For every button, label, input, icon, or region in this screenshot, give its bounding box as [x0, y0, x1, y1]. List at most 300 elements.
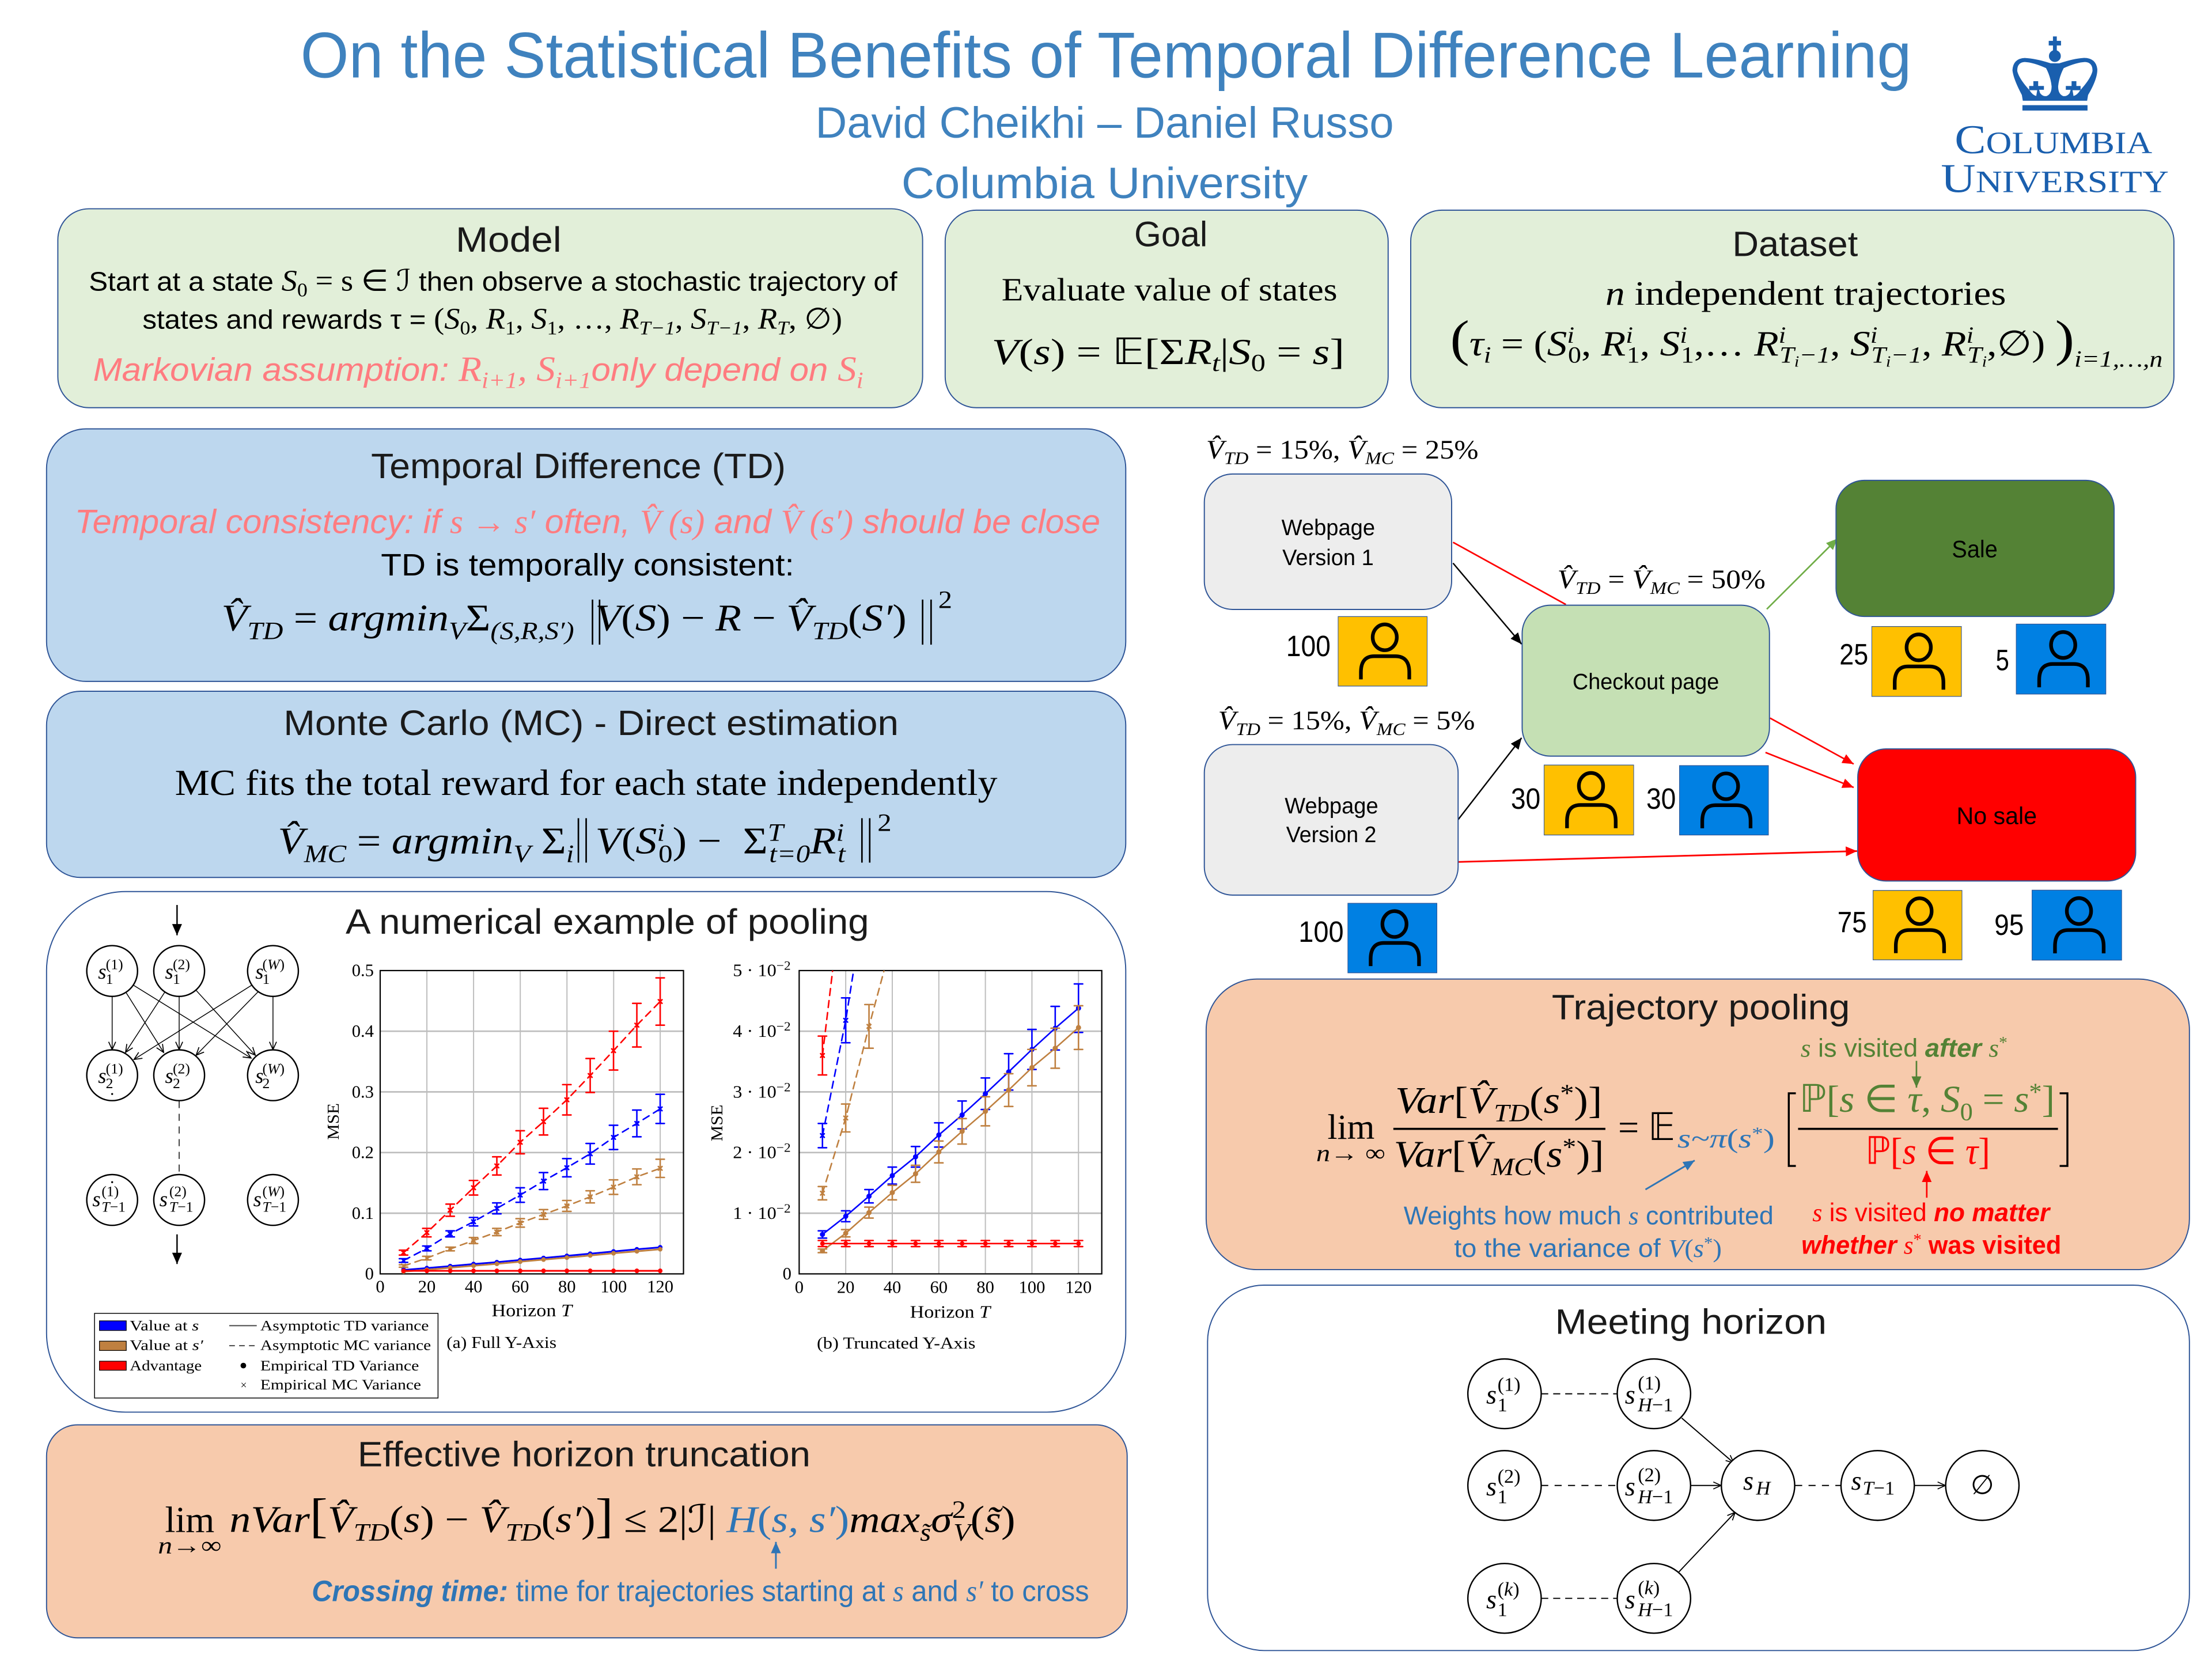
formula: MC variance denominator: s [1546, 1133, 1561, 1175]
legend: Asymptotic MC variance [260, 1337, 431, 1354]
formula: expectation subscript: s~π (s [1677, 1124, 1749, 1154]
axis labels: full y-axis: 0.2 [352, 1143, 374, 1162]
formula: trajectories: = ( [1491, 324, 1547, 363]
axis labels: full y-axis: Horizon T [491, 1301, 573, 1320]
formula: variance bound: TD [505, 1518, 541, 1546]
axis labels: truncated y-axis: MSE [709, 1105, 726, 1141]
callout: crossing time: Crossing time: time for trajectories starting at s and s′ to cross [312, 1574, 1089, 1608]
formula: MC variance denominator: * [1562, 1134, 1576, 1161]
box: checkout page [1522, 605, 1770, 756]
caption: truncated y-axis: (b) Truncated Y-Axis [817, 1335, 975, 1353]
label: webpage 1 values: TD [1224, 449, 1248, 468]
box: webpage version 2: Webpage [1285, 794, 1378, 819]
panel: trajectory pooling [1206, 979, 2190, 1270]
series: TD value at s [818, 984, 1083, 1238]
formula: trajectories: , [1581, 324, 1601, 363]
formula: TD variance numerator: * [1560, 1080, 1574, 1107]
diagram: meeting graph: s [1625, 1381, 1635, 1410]
formula: MC estimator: R [809, 820, 836, 862]
formula: TD variance numerator: )] [1574, 1080, 1602, 1122]
formula: trajectories: R [1942, 324, 1963, 363]
formula: trajectories: 1 [1627, 342, 1640, 368]
text: model description line 2: , [743, 303, 758, 336]
text: MC fits: MC fits the total reward for each state independently [175, 762, 998, 803]
text: TD is temporally consistent: TD is temporally consistent: [381, 548, 794, 582]
formula: equals expectation: = 𝔼 [1618, 1107, 1675, 1149]
label: webpage 2 values: V̂ [1359, 706, 1375, 736]
label: webpage 1 values: = 15%, [1248, 435, 1347, 465]
axis labels: truncated y-axis: −2 [777, 1019, 791, 1033]
diagram: meeting graph: H−1 [1637, 1394, 1673, 1416]
text: model description line 1: Start at a state S [89, 264, 296, 297]
formula: trajectories: 1 [1681, 342, 1694, 368]
axis labels: truncated y-axis: −2 [777, 1201, 791, 1215]
text: model description line 2: 1 [547, 317, 557, 339]
axis labels: truncated y-axis: −2 [777, 959, 791, 973]
axis labels: truncated y-axis [709, 959, 1092, 1321]
formula: trajectories: R [1754, 324, 1776, 363]
icon: 75 yellow users: 75 [1838, 905, 1867, 938]
nodes row 2: (2) [173, 1060, 190, 1077]
diagram: meeting graph: T−1 [1863, 1478, 1895, 1499]
heading: goal: Goal [1134, 214, 1207, 253]
formula: trajectories: , [1640, 324, 1660, 363]
nodes row 2 [87, 1050, 298, 1101]
nodes row 1 [87, 946, 298, 997]
formula: expectation subscript: * [1752, 1123, 1763, 1143]
text: model description line 2: , [471, 303, 486, 336]
formula: MC estimator: i [836, 819, 844, 847]
heading: monte carlo: Monte Carlo (MC) - Direct estimation [283, 703, 899, 743]
label: webpage 2 values: V̂ [1218, 706, 1234, 736]
nodes row 3 [87, 1175, 298, 1225]
formula: expectation subscript: ) [1763, 1124, 1775, 1154]
formula: trajectories: −1 [1891, 342, 1922, 368]
formula: trajectories: ,… [1694, 324, 1754, 363]
legend: × [241, 1380, 247, 1392]
diagram: meeting graph: H [1755, 1478, 1771, 1499]
nodes row 2: 2 [263, 1075, 270, 1092]
formula: probability numerator: ℙ[s ∈ τ, S [1800, 1078, 1960, 1120]
formula: variance bound: ( [389, 1499, 404, 1541]
legend: Value at s [130, 1317, 199, 1334]
series: TD lines [404, 1247, 660, 1271]
formula: trajectories: i [1779, 322, 1786, 348]
callout: weights line 2: ) [1713, 1234, 1722, 1263]
diagram: meeting graph: s [1486, 1381, 1497, 1410]
formula: MC estimator: i [566, 840, 574, 868]
formula: limit subscript: n→ ∞ [1316, 1141, 1385, 1167]
nodes row 2: 2 [106, 1075, 113, 1092]
text: model description line 2: 0 [460, 317, 471, 339]
formula: limit operator: lim [1327, 1108, 1374, 1147]
axis labels: full y-axis: MSE [325, 1103, 343, 1140]
formula: TD estimator: Σ [466, 597, 490, 639]
formula: variance bound: ( [541, 1499, 555, 1541]
nodes row 3: s [253, 1187, 262, 1211]
nodes row 1: 1 [106, 971, 113, 987]
formula: TD estimator: V̂ [221, 597, 245, 639]
diagram: meeting graph [1468, 1359, 2019, 1633]
callout: visited after: * [1999, 1034, 2008, 1052]
box: webpage version 1: Webpage [1282, 516, 1375, 540]
formula: value function: t [1212, 350, 1221, 377]
nodes row 1: (W) [263, 956, 285, 972]
label: checkout values: = [1601, 565, 1632, 594]
formula: trajectories: i [1626, 322, 1633, 348]
formula: variance bound: nVar [V̂ [229, 1490, 351, 1543]
nodes row 3: s [92, 1187, 101, 1211]
heading: effective horizon: Effective horizon truncation [358, 1435, 810, 1474]
axis labels: full y-axis [325, 961, 673, 1320]
nodes row 1: s [255, 960, 264, 983]
axis labels: full y-axis: 0 [376, 1277, 385, 1296]
formula: probability numerator: s [2014, 1078, 2029, 1120]
text: model description line 2: R [434, 303, 842, 339]
formula: MC estimator: V̂ [278, 820, 301, 862]
diagram: meeting graph: s [1851, 1467, 1862, 1496]
axis labels: full y-axis: 0.3 [352, 1082, 374, 1101]
panel: meeting horizon [1207, 1285, 2190, 1650]
fraction line [1798, 1128, 2058, 1130]
formula: TD estimator: TD [812, 617, 848, 645]
formula: MC estimator: argmin [392, 820, 500, 862]
legend: Empirical MC Variance [260, 1376, 421, 1393]
diagram: meeting graph: H−1 [1637, 1599, 1673, 1620]
diagram: meeting graph: (k) [1498, 1578, 1520, 1600]
nodes row 3: (2) [169, 1183, 187, 1200]
formula: norm bars [578, 818, 870, 863]
text: model description line 2: , ∅) [789, 303, 842, 336]
formula: trajectories: (τ [1450, 310, 1482, 367]
formula: TD variance numerator: ( [1529, 1080, 1544, 1122]
text: model description line 2: 1 [505, 317, 516, 339]
nodes row 3: (1) [101, 1183, 119, 1200]
arrow: exit [176, 1234, 177, 1264]
formula: value function: 0 [1251, 350, 1266, 377]
axis labels: truncated y-axis: 60 [930, 1277, 948, 1297]
formula: probability numerator: = [1973, 1078, 2014, 1120]
diagram: meeting graph: (k) [1638, 1577, 1660, 1599]
heading: meeting horizon: Meeting horizon [1555, 1302, 1827, 1342]
axis labels: full y-axis: 0.5 [352, 961, 374, 980]
panel: model [58, 209, 923, 408]
legend: Advantage [130, 1357, 202, 1374]
formula: trajectories: ) [2055, 310, 2074, 367]
box: no sale: No sale [1956, 802, 2037, 830]
arrow: to weights [1645, 1161, 1695, 1190]
text: model description line 2: states and rewards τ = (S [142, 303, 459, 336]
formula: TD estimator: V(S) − R − V̂ [595, 597, 810, 639]
caption: full y-axis: (a) Full Y-Axis [446, 1334, 556, 1352]
text: model description line 2: R [434, 303, 842, 339]
formula: trajectories: i [1982, 353, 1987, 370]
formula: variance bound: s′)] ≤ 2|ℐ| H(s, s′ )max [555, 1490, 912, 1543]
callout: weights line 1: Weights how much s contributed [1404, 1202, 1774, 1230]
label: webpage 1 values: V̂ [1347, 435, 1364, 465]
label: webpage 2 values: = 5% [1406, 706, 1475, 736]
formula: trajectories: i [1794, 353, 1799, 370]
axis labels: full y-axis: 0.1 [352, 1203, 374, 1223]
formula: norm bars [593, 600, 931, 645]
formula: trajectories: i [1567, 322, 1574, 348]
formula: trajectories: i [1870, 322, 1878, 348]
box: webpage version 1 [1205, 474, 1452, 609]
legend: Value at s′ [130, 1337, 203, 1354]
series: MC beyond axis [817, 970, 885, 1200]
icon: 75 yellow users [1838, 891, 1962, 960]
nodes row 2: s [255, 1064, 264, 1088]
diagram: meeting graph: 1 [1498, 1486, 1508, 1508]
axis labels: full y-axis: 0 [365, 1264, 374, 1283]
arrow: to crossing time [775, 1542, 777, 1569]
text: model description line 2: S [434, 303, 842, 339]
formula: trajectories: i [1967, 322, 1974, 348]
icon: 25 yellow users [1839, 627, 1961, 696]
nodes row 1: 1 [263, 971, 270, 987]
formula: variance bound: s) − V̂ [404, 1499, 503, 1541]
panel: effective horizon truncation [47, 1425, 1127, 1638]
box: no sale [1858, 749, 2136, 881]
formula: probability numerator: 0 [1960, 1098, 1973, 1126]
formula: MC estimator: V(S [595, 820, 654, 862]
formula: variance bound: s̃ [920, 1518, 933, 1546]
label: checkout values: MC [1650, 578, 1680, 598]
series: TD value at s prime [818, 1006, 1083, 1253]
formula: TD estimator: ( [848, 597, 862, 639]
formula: brackets [1789, 1093, 2067, 1166]
icon: 5 blue users [1996, 624, 2106, 694]
axis labels: truncated y-axis: 4 · 10 [733, 1021, 774, 1041]
chart: truncated y-axis [709, 861, 1102, 1353]
formula: MC estimator: V [513, 840, 533, 868]
series: MC value at s prime [399, 1159, 664, 1268]
nodes row 2: (W) [263, 1060, 285, 1077]
axis labels: truncated y-axis: 100 [1018, 1277, 1045, 1297]
diagram: meeting graph: (2) [1498, 1465, 1521, 1487]
diagram: meeting graph: (1) [1638, 1372, 1661, 1394]
callout: temporal consistency: Temporal consistency: if s → s′ often, V̂ (s) and V̂ (s′) should be close [75, 503, 1100, 541]
heading: dataset: Dataset [1732, 224, 1858, 263]
axis labels: full y-axis: 20 [418, 1277, 435, 1296]
axis labels: truncated y-axis: −2 [777, 1080, 791, 1094]
axis labels: truncated y-axis: 2 · 10 [733, 1143, 774, 1162]
arrow: to denominator [1926, 1171, 1927, 1198]
label: checkout values: = 50% [1680, 565, 1766, 594]
axis labels: full y-axis: 0.4 [352, 1021, 374, 1041]
formula: trajectories: 0 [1568, 342, 1581, 368]
heading: trajectory pooling: Trajectory pooling [1552, 987, 1850, 1027]
nodes row 1: s [165, 960, 173, 983]
diagram: meeting graph: (1) [1498, 1374, 1521, 1396]
formula: variance bound: ( [971, 1499, 984, 1541]
text: model description line 2: T [777, 317, 790, 339]
nodes row 3: T−1 [169, 1199, 194, 1215]
box: checkout page: Checkout page [1573, 669, 1719, 694]
chart: full y-axis [325, 961, 684, 1352]
axis labels: truncated y-axis: 0 [783, 1264, 791, 1283]
formula: MC variance denominator: MC [1490, 1153, 1533, 1181]
nodes row 3: T−1 [101, 1199, 126, 1215]
formula: MC estimator: T [768, 819, 785, 847]
diagram: meeting graph: s [1486, 1585, 1497, 1615]
legend: Empirical TD Variance [260, 1357, 419, 1374]
title: On the Statistical Benefits of Temporal Difference Learning [301, 19, 1911, 92]
diagram: meeting graph: 1 [1498, 1394, 1508, 1416]
formula: MC estimator: t=0 [769, 840, 810, 868]
formula: trajectories: i [1886, 353, 1891, 370]
diagram: meeting graph: s [1743, 1467, 1753, 1496]
icon: 100 yellow users: 100 [1286, 629, 1331, 662]
panel: monte carlo [47, 691, 1126, 877]
axis labels: truncated y-axis: Horizon T [910, 1302, 991, 1321]
formula: trajectories: S [1547, 324, 1565, 363]
axis labels: truncated y-axis: 1 · 10 [733, 1203, 774, 1223]
formula: variance bound: TD [354, 1518, 389, 1546]
icon: 25 yellow users: 25 [1839, 637, 1868, 671]
formula: MC estimator: MC [304, 840, 347, 868]
label: checkout values: V̂ [1558, 565, 1574, 594]
formula: trajectories: , [1922, 324, 1942, 363]
icon: 30 yellow users [1511, 765, 1634, 835]
diagram: meeting graph: s [1625, 1585, 1635, 1615]
panel: goal [945, 210, 1388, 408]
formula: value function: S [1229, 331, 1247, 372]
callout: visited no matter line 2: whether s [1801, 1231, 1914, 1259]
arrow: to numerator [1916, 1061, 1917, 1088]
callout: weights line 2: to the variance of V(s [1454, 1234, 1703, 1263]
axis labels: full y-axis: 120 [647, 1277, 673, 1296]
text: model description line 2: T−1 [639, 317, 675, 339]
formula: MC estimator: 0 [658, 840, 673, 868]
series: advantage [818, 1241, 1083, 1247]
legend: Asymptotic TD variance [260, 1317, 429, 1334]
callout: Markovian assumption: i+1 [482, 367, 518, 393]
logo text: U NIVERSITY [1941, 156, 2169, 201]
box: webpage version 2 [1205, 745, 1458, 895]
formula: MC estimator: ) − Σ [673, 820, 768, 862]
formula: TD estimator: argmin [328, 597, 437, 639]
formula: MC estimator: t [838, 840, 846, 868]
diagram: meeting graph: s [1625, 1472, 1635, 1502]
formula: trajectories: , [1830, 324, 1850, 363]
affiliation: Columbia University [902, 159, 1308, 208]
formula: TD estimator: 2 [938, 586, 952, 614]
series: MC value at s [399, 1094, 664, 1262]
icon: 95 blue users: 95 [1994, 908, 2024, 941]
label: webpage 1 values: = 25% [1394, 435, 1479, 465]
panel: temporal difference [47, 429, 1126, 681]
label: checkout values: TD [1575, 578, 1601, 598]
label: webpage 2 values: TD [1236, 719, 1260, 739]
label: webpage 1 values: MC [1365, 449, 1395, 468]
callout: Markovian assumption: i [857, 367, 863, 393]
text: model description line 1: = s ∈ ℐ [308, 264, 419, 297]
icon: 5 blue users: 5 [1996, 643, 2009, 676]
callout: weights line 2: * [1704, 1234, 1713, 1252]
callout: Markovian assumption: Markovian assumption: R [93, 350, 480, 389]
formula: MC estimator: = [346, 820, 392, 862]
text: evaluate value: Evaluate value of states [1002, 272, 1338, 308]
callout: Markovian assumption: i+1 [555, 367, 592, 393]
diagram: trajectory graph [87, 905, 298, 1264]
formula: variance bound: 2 [952, 1496, 966, 1524]
axis labels: truncated y-axis: 120 [1065, 1277, 1092, 1297]
formula: trajectories: i=1,…,n [2074, 346, 2162, 372]
nodes row 3: (W) [263, 1183, 285, 1200]
formula: limit operator: lim [165, 1499, 214, 1540]
nodes row 1: s [98, 960, 107, 983]
callout: visited no matter line 2: * [1913, 1231, 1922, 1249]
axis labels: full y-axis: 40 [465, 1277, 482, 1296]
text: model description line 2: , [675, 303, 691, 336]
formula: variance bound: s̃) [984, 1499, 1014, 1541]
icon: 30 blue users [1646, 766, 1768, 835]
series: MC advantage [399, 978, 664, 1255]
formula: TD variance numerator: TD [1494, 1099, 1529, 1127]
label: webpage 2 values: MC [1376, 719, 1406, 739]
legend [94, 1313, 438, 1398]
text: model description line 2: , …, [557, 303, 620, 336]
formula: value function: | [1220, 331, 1229, 372]
axis labels: truncated y-axis: −2 [777, 1141, 791, 1155]
diagram: meeting graph: H−1 [1637, 1486, 1673, 1508]
formula: TD estimator: = [283, 597, 328, 639]
panel: dataset [1411, 210, 2174, 408]
formula: variance bound: V [953, 1518, 974, 1546]
diagram: meeting graph: 1 [1498, 1599, 1508, 1620]
nodes row 1: 1 [173, 971, 180, 987]
graph edges [112, 984, 273, 1059]
nodes row 2: s [165, 1064, 173, 1088]
formula: probability numerator: ] [2042, 1078, 2055, 1120]
nodes row 1: (1) [106, 956, 123, 972]
formula: TD estimator: (S,R,S′) [490, 617, 574, 645]
formula: trajectories: T [1779, 342, 1830, 370]
formula: TD estimator: S′) [862, 597, 905, 639]
arrows: flows [1453, 539, 1857, 862]
formula: variance bound: σ [931, 1499, 953, 1541]
box: webpage version 2: Version 2 [1286, 823, 1376, 847]
formula: trajectories: i [1680, 322, 1687, 348]
diagram: meeting graph: (2) [1638, 1464, 1661, 1486]
box: webpage version 1: Version 1 [1282, 546, 1374, 570]
formula: TD variance numerator: s [1544, 1080, 1558, 1122]
icon: 100 blue users: 100 [1298, 915, 1344, 948]
logo: Columbia University [1941, 36, 2169, 201]
axis labels: truncated y-axis: 40 [884, 1277, 901, 1297]
formula: value function: V (s) = 𝔼[Σ R [992, 331, 1207, 372]
formula: trajectories: T [1967, 342, 1987, 370]
callout: Markovian assumption: only depend on [592, 351, 838, 388]
formula: MC variance denominator: Var [V̂ [1394, 1133, 1489, 1175]
formula: probability numerator: * [2029, 1078, 2042, 1106]
formula: MC variance denominator: )] [1576, 1133, 1604, 1175]
axis labels: truncated y-axis: 3 · 10 [733, 1082, 774, 1101]
icon: 95 blue users [1994, 890, 2122, 960]
formula: TD variance numerator: Var [V̂ [1395, 1080, 1491, 1122]
panel: numerical example of pooling [47, 861, 1126, 1412]
funnel diagram [1205, 435, 2136, 973]
text: n independent trajectories: n independent trajectories [1605, 275, 2006, 312]
arrow: entry [176, 905, 177, 935]
formula: value function: = [1266, 331, 1312, 372]
formula: probability denominator: ℙ[s ∈ τ] [1865, 1130, 1990, 1172]
axis labels: truncated y-axis: 80 [976, 1277, 994, 1297]
formula: MC estimator: Σ [531, 820, 566, 862]
text: model description line 2: R [434, 303, 842, 339]
box: sale [1836, 480, 2114, 616]
